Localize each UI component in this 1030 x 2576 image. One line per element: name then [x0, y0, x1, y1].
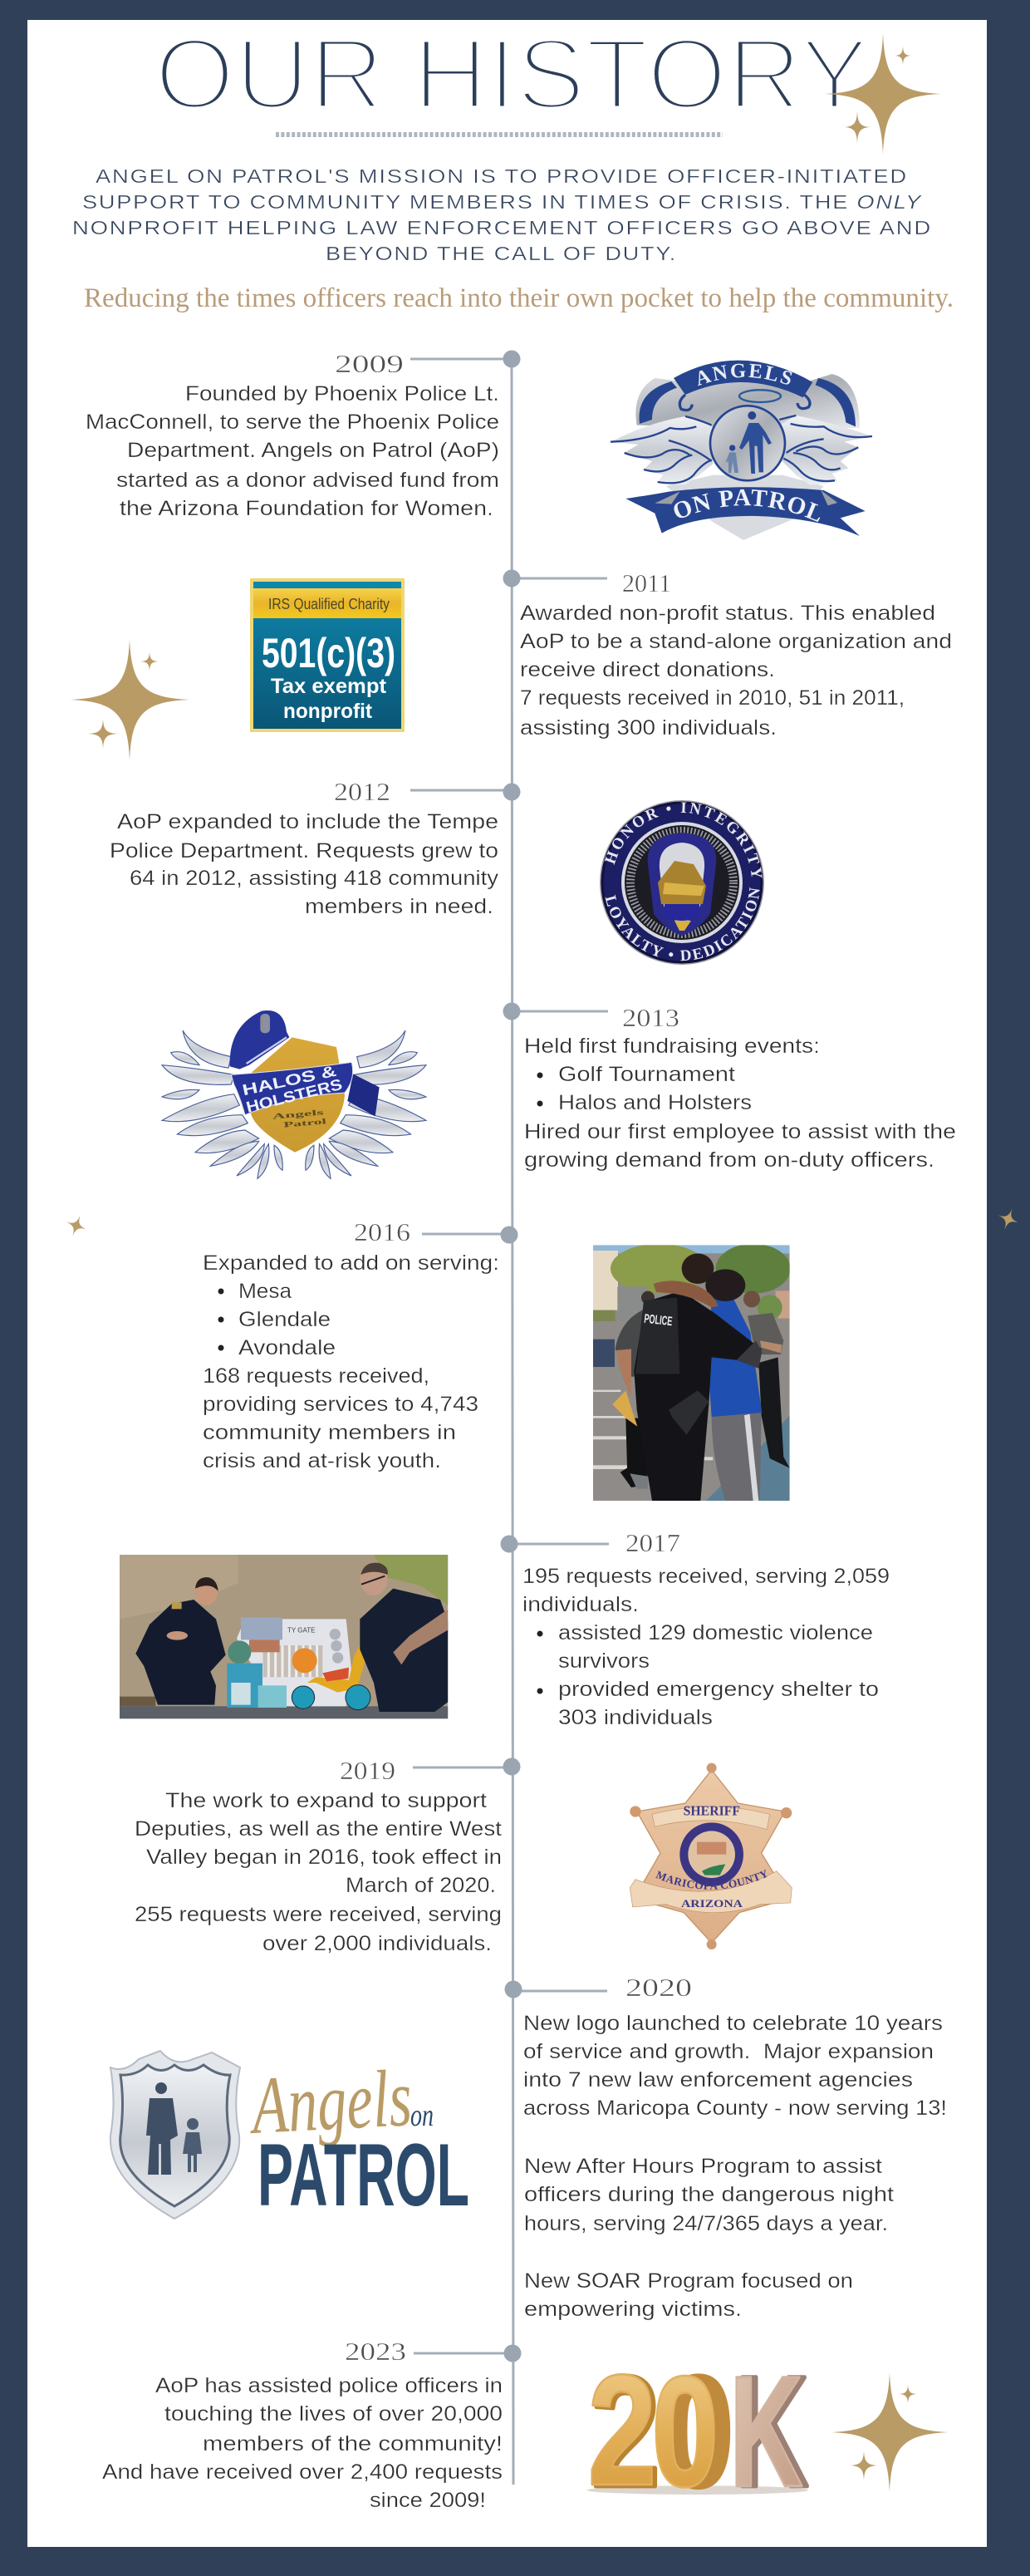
dotted divider	[276, 132, 723, 137]
entry: 2020: empowering victims.	[524, 2298, 742, 2321]
entry: 2017: survivors	[558, 1649, 650, 1673]
badge: Maricopa County sheriff star: MARICOPA COUNTY	[655, 1870, 768, 1890]
badge: Maricopa County sheriff star: ARIZONA	[681, 1898, 743, 1910]
entry: 2009	[86, 349, 499, 520]
entry: 2016: Avondale	[238, 1336, 336, 1359]
badge: 501(c)(3): Tax exempt	[271, 675, 387, 698]
entry: 2016: Glendale	[238, 1308, 331, 1331]
entry: 2009: Founded by Phoenix Police Lt.	[185, 382, 499, 406]
logo: Angels on Patrol crest	[610, 361, 872, 540]
graphic: 3D 20K: 2	[587, 2342, 657, 2519]
entry: 2011: assisting 300 individuals.	[520, 716, 777, 740]
entry: 2020: into 7 new law enforcement agencies	[523, 2068, 913, 2092]
entry: 2012: 2012	[334, 777, 390, 806]
logo: new Angels on Patrol	[110, 2051, 469, 2225]
logo: Halos and Holsters: Angels	[272, 1109, 325, 1122]
entry: 2011: 2011	[622, 568, 671, 597]
entry: 2017: 2017	[625, 1528, 680, 1557]
entry: 2012	[110, 777, 499, 918]
entry: 2016: crisis and at-risk youth.	[203, 1449, 441, 1472]
entry: 2016: providing services to 4,743	[203, 1393, 478, 1416]
mission statement: ANGEL ON PATROL'S MISSION IS TO PROVIDE OFFICER-INITIATED	[96, 165, 908, 187]
logo: Halos and Holsters: HOLSTERS	[244, 1075, 344, 1116]
entry: 2020: of service and growth. Major expansion	[523, 2040, 934, 2063]
entry: 2020: 2020	[625, 1973, 692, 2002]
seal: Tempe police officer	[600, 800, 764, 965]
entry: 2019: The work to expand to support	[165, 1789, 487, 1812]
mission statement: SUPPORT TO COMMUNITY MEMBERS IN TIMES OF CRISIS. THE ONLY	[82, 191, 922, 213]
badge: 501(c)(3): 501(c)(3)	[262, 630, 395, 676]
entry: 2016: Expanded to add on serving:	[203, 1251, 499, 1275]
entry: 2019: Deputies, as well as the entire West	[135, 1817, 502, 1841]
entry: 2017: 303 individuals	[558, 1706, 713, 1729]
entry: 2013: Halos and Holsters	[558, 1091, 752, 1114]
logo: new Angels on Patrol: on	[410, 2098, 434, 2133]
mission statement	[72, 165, 932, 264]
logo: Angels on Patrol crest: ON PATROL	[674, 489, 821, 522]
entry: 2012: members in need.	[305, 895, 493, 918]
graphic: 3D 20K: K	[735, 2344, 808, 2520]
seal: Tempe police officer: HONOR • INTEGRITY	[605, 803, 763, 878]
graphic: 3D 20K: 2	[591, 2344, 660, 2520]
entry: 2016	[203, 1217, 499, 1472]
entry: 2013: 2013	[622, 1003, 679, 1032]
graphic: 3D 20K: 0	[651, 2344, 719, 2520]
photo: officers with donated baby items: TY GATE	[287, 1626, 315, 1634]
icon: small gold star left	[61, 1211, 91, 1241]
entry: 2012: AoP expanded to include the Tempe	[117, 810, 498, 833]
entry: 2009: started as a donor advised fund from	[116, 469, 499, 492]
photo: officer hugging community member	[593, 1244, 791, 1501]
entry: 2012: Police Department. Requests grew to	[110, 839, 498, 863]
graphic: 3D 20K: K	[729, 2344, 803, 2520]
entry: 2019: 255 requests were received, serving	[135, 1903, 502, 1926]
graphic: 3D 20K: 0	[663, 2344, 733, 2520]
entry: 2011: 7 requests received in 2010, 51 in 2011,	[520, 686, 905, 710]
entry: 2013	[524, 1003, 956, 1172]
logo: Angels on Patrol crest: ANGELS	[698, 364, 792, 386]
entry: 2023: And have received over 2,400 requests	[102, 2460, 503, 2484]
entry: 2023: members of the community!	[203, 2432, 503, 2456]
entry: 2020: New logo launched to celebrate 10 years	[523, 2012, 943, 2035]
entry: 2023: AoP has assisted police officers in	[155, 2374, 503, 2397]
photo: officer hugging community member: POLICE	[644, 1312, 673, 1329]
mission statement: NONPROFIT HELPING LAW ENFORCEMENT OFFICERS GO ABOVE AND	[72, 217, 932, 238]
badge: 501(c)(3): nonprofit	[283, 700, 373, 723]
icon: silver shield	[110, 2051, 240, 2219]
entry: 2013: Hired our first employee to assist with the	[524, 1120, 956, 1143]
entry: 2009: 2009	[335, 349, 404, 378]
entry: 2023: 2023	[345, 2337, 406, 2366]
entry: 2016: community members in	[203, 1421, 456, 1444]
icon: gold sparkle bottom	[831, 2372, 949, 2492]
entry: 2020: across Maricopa County - now serving 13!	[523, 2097, 947, 2120]
entry: 2017	[522, 1528, 890, 1729]
entry: 2016: Mesa	[238, 1280, 292, 1303]
entry: 2009: Department. Angels on Patrol (AoP)	[127, 439, 499, 462]
entry: 2023: since 2009!	[370, 2489, 486, 2512]
logo: Halos and Holsters	[162, 1010, 426, 1178]
entry: 2017: assisted 129 domestic violence	[558, 1621, 873, 1644]
entry: 2017: 195 requests received, serving 2,059	[522, 1565, 890, 1588]
entry: 2013: Golf Tournament	[558, 1063, 735, 1086]
entry: 2011: receive direct donations.	[520, 658, 775, 681]
entry: 2013: growing demand from on-duty officers.	[524, 1148, 934, 1172]
entry: 2016: 168 requests received,	[203, 1364, 429, 1388]
entry: 2011: Awarded non-profit status. This enabled	[520, 602, 935, 625]
entry: 2020: New After Hours Program to assist	[524, 2155, 882, 2178]
mission statement: BEYOND THE CALL OF DUTY.	[326, 243, 677, 264]
logo: new Angels on Patrol: PATROL	[258, 2125, 469, 2225]
entry: 2012: 64 in 2012, assisting 418 community	[130, 867, 499, 890]
entry: 2019	[135, 1756, 502, 1955]
logo: Halos and Holsters: HALOS &	[241, 1062, 338, 1099]
photo: officers with donated baby items	[120, 1555, 448, 1718]
logo: new Angels on Patrol: Angels	[246, 2053, 414, 2151]
entry: 2017: provided emergency shelter to	[558, 1678, 879, 1701]
graphic: 3D 20K	[587, 2342, 808, 2520]
entry: 2019: 2019	[340, 1756, 395, 1785]
title: OUR HISTORY	[154, 17, 869, 130]
badge: Maricopa County sheriff star	[630, 1763, 792, 1949]
tagline: Reducing the times officers reach into their own pocket to help the community.	[84, 283, 954, 313]
seal: Tempe police officer: LOYALTY • DEDICATION	[605, 887, 760, 961]
timeline spine	[512, 359, 513, 2485]
logo: Halos and Holsters: Patrol	[283, 1118, 327, 1130]
timeline nodes and connectors	[410, 351, 609, 2362]
entry: 2013: Held first fundraising events:	[524, 1035, 820, 1058]
entry: 2023	[102, 2337, 503, 2512]
icon: small gold star right	[993, 1204, 1023, 1234]
icon: gold sparkle top	[825, 33, 941, 155]
entry: 2016: 2016	[354, 1217, 410, 1246]
badge: Maricopa County sheriff star: SHERIFF	[684, 1802, 740, 1818]
entry: 2011	[520, 568, 952, 740]
badge: 501(c)(3): IRS Qualified Charity	[268, 596, 390, 612]
entry: 2019: Valley began in 2016, took effect in	[146, 1846, 502, 1869]
entry: 2020: officers during the dangerous night	[524, 2183, 894, 2206]
entry: 2009: MacConnell, to serve the Phoenix Police	[86, 410, 499, 434]
entry: 2023: touching the lives of over 20,000	[164, 2402, 503, 2426]
entry: 2009: the Arizona Foundation for Women.	[120, 497, 493, 520]
entry: 2019: March of 2020.	[346, 1874, 496, 1897]
entry: 2020	[523, 1973, 947, 2321]
icon: gold sparkle left	[70, 639, 189, 760]
badge: 501(c)(3)	[250, 578, 405, 732]
entry: 2020: New SOAR Program focused on	[524, 2269, 853, 2293]
entry: 2011: AoP to be a stand-alone organization and	[520, 630, 952, 653]
entry: 2020: hours, serving 24/7/365 days a year.	[524, 2212, 888, 2235]
entry: 2019: over 2,000 individuals.	[262, 1932, 492, 1955]
entry: 2017: individuals.	[522, 1593, 639, 1616]
